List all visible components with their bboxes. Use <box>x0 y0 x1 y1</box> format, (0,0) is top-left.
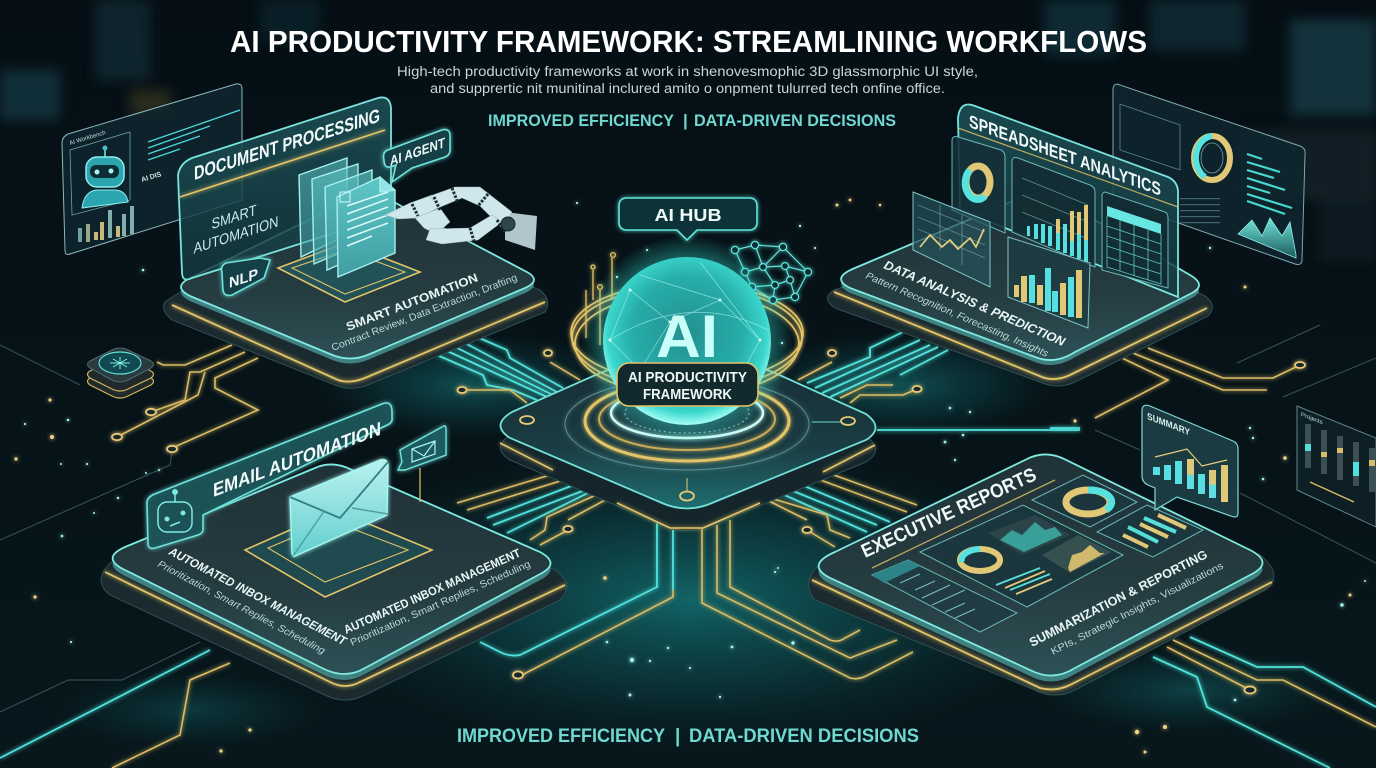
tagline: top <box>488 111 896 130</box>
icon: robot <box>158 490 192 532</box>
platform glass top <box>113 464 551 674</box>
platform caption: SUMMARIZATION & REPORTING <box>1027 547 1210 650</box>
label: AI hub <box>619 198 757 262</box>
platform lip <box>113 470 551 680</box>
platform caption: right: Prioritization, Smart Replies, Scheduling <box>349 559 532 649</box>
callout: summary chart: SUMMARY <box>1147 411 1190 439</box>
tagline: top: DATA-DRIVEN DECISIONS <box>694 111 896 130</box>
circuit nodes on hub <box>520 416 855 500</box>
card: donut <box>952 136 1005 233</box>
platform caption: left: AUTOMATED INBOX MANAGEMENT <box>166 544 350 649</box>
floating screen: AI agent: AI Workbench <box>69 130 107 147</box>
title: AI PRODUCTIVITY FRAMEWORK: STREAMLINING WORKFLOWS <box>230 24 1147 59</box>
bubble: NLP <box>222 258 270 295</box>
platform caption: SMART AUTOMATION <box>344 271 480 334</box>
orbit rings <box>571 283 803 396</box>
card: bar chart <box>1012 158 1095 267</box>
heading: SPREADSHEET ANALYTICS <box>969 111 1161 200</box>
icon: envelope <box>290 460 388 556</box>
panel: central AI hub <box>500 198 876 530</box>
banner <box>147 403 392 548</box>
trace nodes <box>112 350 1305 694</box>
far-right dashboard screen: Projects <box>1301 411 1323 426</box>
documents <box>299 158 395 277</box>
label: AI productivity framework <box>617 363 758 406</box>
subtitle: High-tech productivity frameworks at work in shenovesmophic 3D glassmorphic UI style, <box>397 64 978 79</box>
floating screen: dashboard <box>1113 84 1305 264</box>
tray under documents <box>278 243 420 302</box>
bubble: NLP: NLP <box>229 266 258 292</box>
tagline: top: | <box>683 111 688 130</box>
platform glass top <box>819 454 1262 676</box>
circuit antennas <box>586 253 615 345</box>
platform base <box>101 468 566 700</box>
card: bars <box>1097 505 1203 557</box>
label: smart automation: SMART <box>212 202 257 233</box>
platform caption: DATA ANALYSIS & PREDICTION <box>882 258 1068 349</box>
panel: document processing <box>62 84 548 388</box>
floating screen: AI agent: AI DIS <box>141 171 163 184</box>
card: line chart <box>913 192 990 287</box>
subtitle: and supprertic nit munitinal inclured amito o onpment tulurred tech onfine office. <box>430 81 945 96</box>
platform caption: Contract Review, Data Extraction, Drafting <box>330 273 519 354</box>
panel: spreadsheet analytics <box>828 84 1305 386</box>
banner: EMAIL AUTOMATION <box>213 418 381 502</box>
platform base <box>808 470 1274 695</box>
callout: summary chart <box>1142 405 1238 517</box>
platform lip <box>819 460 1262 682</box>
platform glass top <box>841 194 1199 360</box>
subtitle <box>397 64 978 96</box>
icon: neural network <box>731 241 812 304</box>
card: lower bars <box>1008 237 1090 328</box>
robot hand <box>385 187 537 250</box>
platform caption: left: Prioritization, Smart Replies, Scheduling <box>156 559 327 657</box>
tagline: bottom: DATA-DRIVEN DECISIONS <box>689 726 919 747</box>
small stacked chip <box>88 348 154 398</box>
card: dashboard <box>920 505 1123 607</box>
bubble: mail <box>398 426 446 502</box>
platform caption: right: AUTOMATED INBOX MANAGEMENT <box>342 546 523 637</box>
platform glass top <box>181 194 534 358</box>
label: AI productivity framework: AI PRODUCTIVITY <box>628 370 747 386</box>
tray under envelope <box>245 510 432 597</box>
card: list <box>872 560 1017 632</box>
hub platform <box>500 356 876 530</box>
platform base <box>828 210 1212 386</box>
platform caption: Pattern Recognition, Forecasting, Insights <box>864 271 1050 360</box>
card: table <box>1102 192 1168 288</box>
card: donut <box>1032 475 1137 527</box>
sphere: AI <box>656 303 718 370</box>
sphere <box>581 235 793 447</box>
circuit traces: gold <box>112 345 1376 768</box>
bubble: AI agent: AI AGENT <box>390 135 445 170</box>
heading: DOCUMENT PROCESSING <box>194 105 380 185</box>
tagline: bottom: | <box>675 726 680 747</box>
dim wiring <box>0 325 1376 712</box>
platform lip <box>841 199 1199 365</box>
tagline: bottom <box>457 726 919 747</box>
floating screen: AI agent <box>62 84 242 254</box>
panel: email automation <box>101 403 566 700</box>
circuit traces: cyan <box>0 332 1376 768</box>
blurred office skyline <box>0 0 1376 260</box>
panel: executive reports <box>808 405 1274 695</box>
hub rings <box>565 378 809 470</box>
platform lip <box>181 200 534 364</box>
label: smart automation: AUTOMATION <box>194 214 278 258</box>
label: AI hub: AI HUB <box>654 205 722 225</box>
back panel <box>178 97 391 280</box>
back panel <box>958 104 1178 297</box>
heading: EXECUTIVE REPORTS <box>858 464 1040 563</box>
tagline: top: IMPROVED EFFICIENCY <box>488 111 675 130</box>
label: AI productivity framework: FRAMEWORK <box>643 387 732 403</box>
bubble: AI agent <box>384 130 450 182</box>
tagline: bottom: IMPROVED EFFICIENCY <box>457 726 665 747</box>
platform base <box>164 210 548 388</box>
particles <box>14 199 1366 754</box>
platform caption: KPIs, Strategic Insights, Visualizations <box>1049 561 1225 658</box>
far-right dashboard screen <box>1297 406 1376 527</box>
